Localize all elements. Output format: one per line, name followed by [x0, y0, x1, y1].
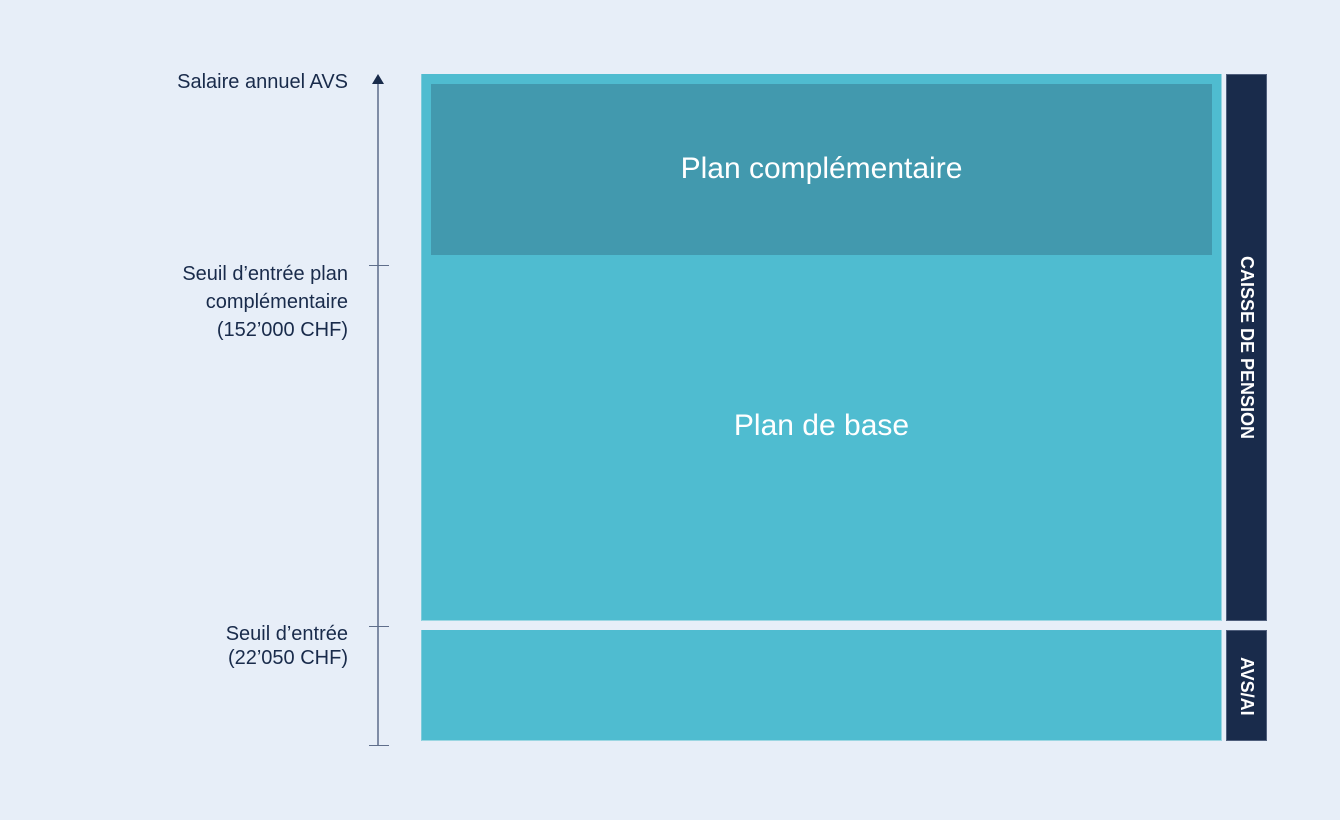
label: complementary plan threshold: complémentaire: [206, 291, 348, 313]
label: entry threshold: [226, 623, 348, 669]
side bar: pension fund: [1226, 74, 1267, 621]
axis line: [377, 82, 379, 746]
label: complementary plan threshold: (152’000 CHF): [217, 319, 348, 341]
label: pension fund: CAISSE DE PENSION: [1237, 256, 1257, 439]
label: complementary plan threshold: Seuil d’entrée plan: [182, 263, 348, 285]
heading: base plan: Plan de base: [734, 409, 909, 442]
label: entry threshold: Seuil d’entrée: [226, 623, 348, 645]
tick: entry threshold: [369, 626, 389, 627]
label: entry threshold: (22’050 CHF): [228, 647, 348, 669]
tick: axis base: [369, 745, 389, 746]
label: AVS/AI: AVS/AI: [1237, 657, 1257, 716]
axis: annual salary scale: [369, 74, 389, 746]
label: complementary plan threshold: [182, 263, 348, 341]
panel: complementary plan: [431, 84, 1212, 255]
panel: pension fund block: [421, 74, 1222, 621]
panel: AVS/AI block: [421, 630, 1222, 741]
label: annual AVS salary: Salaire annuel AVS: [177, 71, 348, 93]
heading: complementary plan: Plan complémentaire: [681, 152, 962, 185]
side bar: AVS/AI: [1226, 630, 1267, 741]
icon: axis arrowhead: [372, 74, 384, 84]
tick: complementary plan threshold: [369, 264, 389, 266]
